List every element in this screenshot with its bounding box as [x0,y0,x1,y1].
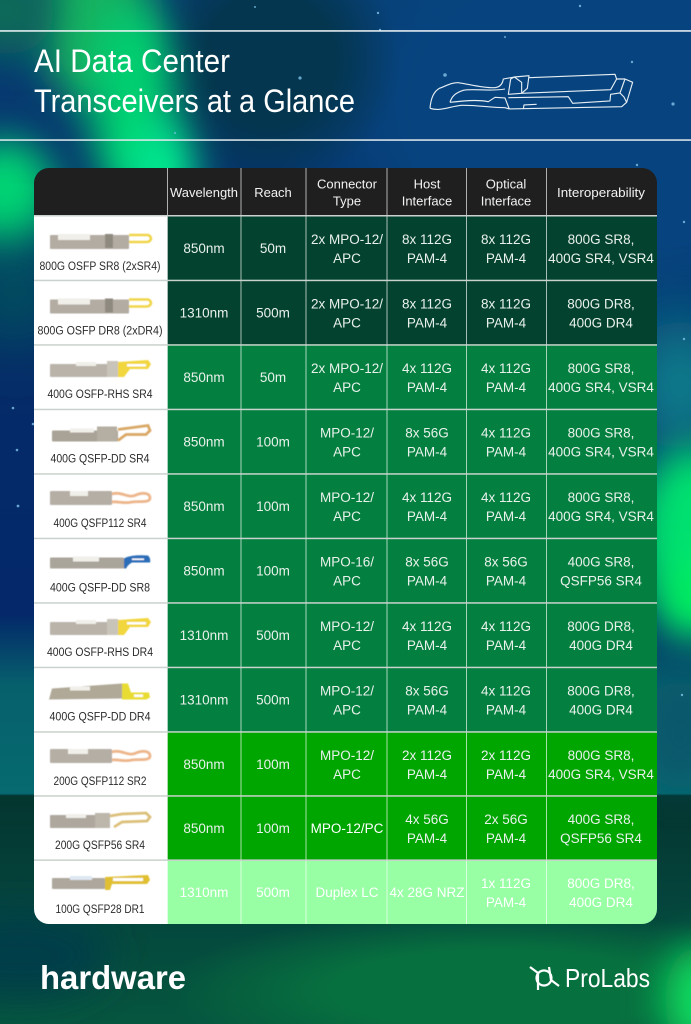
row: 400G OSFP-RHS DR4: 4x 112G [402,619,452,634]
row: 400G QSFP-DD SR4: 850nm [183,434,225,450]
icon: module [50,555,150,568]
row: 800G OSFP DR8: 800G OSFP DR8 (2xDR4) [38,326,163,338]
row: 800G OSFP DR8: APC [333,316,361,330]
row: 400G QSFP-DD DR4: MPO-12/ [320,684,374,698]
row: 800G OSFP SR8: PAM-4 [486,251,527,266]
row: 100G QSFP28 DR1: 100G QSFP28 DR1 [56,904,144,916]
row: 200G QSFP56 SR4: 2x 56G [484,812,528,827]
row: 100G QSFP28 DR1: 800G DR8, [567,876,635,891]
row: 800G OSFP SR8 [34,216,657,280]
row: 400G QSFP-DD DR4: 8x 56G [405,684,449,698]
row: 400G OSFP-RHS SR4: PAM-4 [407,380,448,395]
row: 100G QSFP28 DR1: 500m [256,885,290,900]
row: 200G QSFP112 SR2: 2x 112G [402,748,452,763]
row: 800G OSFP DR8: 500m [256,306,290,320]
row: 400G QSFP112 SR4: MPO-12/ [320,490,374,505]
row: 400G QSFP112 SR4: 4x 112G [402,490,452,505]
row: 200G QSFP112 SR2: MPO-12/ [320,748,374,763]
row: 800G OSFP DR8: 400G DR4 [569,316,633,330]
icon: module [50,234,151,249]
logo: ProLabs [530,963,650,993]
row: 400G QSFP-DD SR8 [34,538,657,602]
title: Transceivers at a Glance [34,83,355,119]
row: 100G QSFP28 DR1: PAM-4 [486,895,527,910]
row: 400G OSFP-RHS SR4: 400G SR4, VSR4 [548,380,654,395]
row: 400G QSFP-DD SR8: PAM-4 [407,574,448,588]
row: 400G QSFP-DD SR8: QSFP56 SR4 [560,574,642,588]
top divider [0,30,691,32]
row: 400G OSFP-RHS SR4: 4x 112G [402,361,452,376]
row: 200G QSFP112 SR2: PAM-4 [486,767,527,782]
row: 100G QSFP28 DR1: 4x 28G NRZ [390,885,464,900]
row: 400G OSFP-RHS DR4: 800G DR8, [567,619,635,634]
table header: Optical [486,176,526,192]
row: 200G QSFP112 SR2 [34,732,657,796]
row: 400G QSFP112 SR4: 800G SR8, [568,490,634,505]
row: 200G QSFP56 SR4: PAM-4 [407,831,448,846]
row: 400G QSFP-DD SR4: 400G QSFP-DD SR4 [50,454,150,466]
row: 800G OSFP SR8: 850nm [183,241,225,256]
row: 400G OSFP-RHS SR4: 400G OSFP-RHS SR4 [48,389,153,401]
title [34,43,355,119]
row: 800G OSFP SR8: 50m [260,241,286,256]
row: 100G QSFP28 DR1: 400G DR4 [569,895,633,910]
row: 400G QSFP112 SR4: 4x 112G [481,490,531,505]
row: 400G QSFP-DD DR4: 400G DR4 [569,702,633,718]
row: 400G OSFP-RHS DR4: APC [333,638,361,653]
table header: Type [333,194,361,208]
row: 400G OSFP-RHS DR4: 4x 112G [481,619,531,634]
title: AI Data Center [34,43,230,79]
row: 400G QSFP112 SR4: PAM-4 [407,509,448,524]
row: 400G OSFP-RHS SR4: 50m [260,370,286,385]
comparison table [34,168,657,924]
row: 200G QSFP56 SR4: 850nm [183,821,225,836]
row: 400G QSFP-DD SR4: MPO-12/ [320,426,374,440]
logo: hardware: hardware [40,959,186,996]
row: 800G OSFP DR8: PAM-4 [407,316,448,330]
row: 400G OSFP-RHS DR4: 500m [256,628,290,643]
table header: Host [414,176,441,192]
row: 800G OSFP DR8: 8x 112G [402,296,452,312]
row: 200G QSFP112 SR2: 850nm [183,757,225,772]
row: 400G QSFP-DD DR4: 1310nm [180,692,228,708]
row: 200G QSFP112 SR2: 400G SR4, VSR4 [548,767,654,782]
row: 100G QSFP28 DR1 [34,860,657,924]
row: 200G QSFP56 SR4: 400G SR8, [568,812,634,827]
row: 400G QSFP112 SR4: 400G QSFP112 SR4 [54,518,147,530]
row: 800G OSFP DR8: 800G DR8, [567,296,635,312]
row: 400G QSFP-DD SR4 [34,410,657,474]
icon: transceiver outline [430,74,633,109]
icon: module [49,684,150,700]
row: 400G QSFP-DD SR8: APC [333,574,361,588]
row: 400G QSFP-DD SR8: 8x 56G [405,554,449,570]
row: 200G QSFP56 SR4: 4x 56G [405,812,449,827]
icon: module [50,813,150,828]
row: 400G QSFP-DD SR4: 8x 56G [405,426,449,440]
table header: Interoperability [557,185,646,200]
icon: module [50,618,151,635]
row: 400G QSFP112 SR4: 850nm [183,499,225,514]
row: 800G OSFP DR8: 1310nm [180,306,228,320]
row: 400G QSFP-DD SR4: 100m [256,434,290,450]
row: 100G QSFP28 DR1: 1310nm [180,885,228,900]
row: 800G OSFP SR8: 2x MPO-12/ [311,232,383,247]
logo: ProLabs: ProLabs [565,963,650,993]
icon: module [52,875,150,890]
row: 400G QSFP-DD DR4: 800G DR8, [567,684,635,698]
row: 800G OSFP SR8: 800G SR8, [568,232,634,247]
row: 200G QSFP112 SR2: 800G SR8, [568,748,634,763]
row: 400G OSFP-RHS DR4: PAM-4 [407,638,448,653]
row: 400G OSFP-RHS SR4: 800G SR8, [568,361,634,376]
row: 400G QSFP-DD DR4: 500m [256,692,290,708]
row: 400G QSFP-DD SR8: 8x 56G [484,554,528,570]
row: 400G QSFP-DD SR8: PAM-4 [486,574,527,588]
row: 400G OSFP-RHS SR4: 4x 112G [481,361,531,376]
row: 800G OSFP SR8: 8x 112G [481,232,531,247]
row: 200G QSFP56 SR4: 100m [256,821,290,836]
row: 400G OSFP-RHS SR4: 850nm [183,370,225,385]
row: 800G OSFP DR8: PAM-4 [486,316,527,330]
row: 400G QSFP-DD DR4: PAM-4 [486,702,527,718]
table header: Connector [317,176,378,192]
row: 400G OSFP-RHS SR4 [34,345,657,409]
icon: ProLabs mark [530,967,559,990]
row: 400G OSFP-RHS SR4: APC [333,380,361,395]
table header: Interface [481,194,531,208]
row: 400G QSFP-DD DR4: 4x 112G [481,684,531,698]
row: 400G QSFP-DD SR4: 4x 112G [481,426,531,440]
row: 400G OSFP-RHS DR4 [34,603,657,667]
row: 400G OSFP-RHS SR4: 2x MPO-12/ [311,361,383,376]
row: 400G QSFP-DD SR4: APC [333,444,361,460]
row: 400G QSFP112 SR4 [34,474,657,538]
row: 400G QSFP-DD DR4: PAM-4 [407,702,448,718]
icon: module [50,491,150,505]
row: 400G QSFP112 SR4: PAM-4 [486,509,527,524]
row: 400G QSFP-DD SR8: MPO-16/ [320,554,374,570]
row: 400G OSFP-RHS SR4: PAM-4 [486,380,527,395]
row: 400G OSFP-RHS DR4: 400G DR4 [569,638,633,653]
row: 400G QSFP-DD SR4: 800G SR8, [568,426,634,440]
row: 800G OSFP DR8 [34,280,657,344]
row: 200G QSFP112 SR2: 200G QSFP112 SR2 [54,776,146,788]
icon: module [50,749,150,763]
row: 400G QSFP-DD SR8: 400G QSFP-DD SR8 [50,582,150,594]
icon: module [50,298,151,314]
row: 200G QSFP56 SR4: MPO-12/PC [311,821,384,836]
table header: Interface [402,194,452,208]
row: 200G QSFP56 SR4: 200G QSFP56 SR4 [55,840,146,852]
row: 400G QSFP-DD SR4: 400G SR4, VSR4 [548,444,654,460]
row: 400G QSFP-DD SR4: PAM-4 [486,444,527,460]
row: 400G QSFP112 SR4: 100m [256,499,290,514]
row: 200G QSFP112 SR2: APC [333,767,361,782]
row: 200G QSFP112 SR2: 100m [256,757,290,772]
row: 100G QSFP28 DR1: 1x 112G [481,876,531,891]
row: 400G QSFP-DD SR8: 400G SR8, [568,554,634,570]
table header: Reach [254,185,292,200]
row: 800G OSFP SR8: APC [333,251,361,266]
bottom divider [0,139,691,141]
row: 400G OSFP-RHS DR4: 1310nm [180,628,228,643]
row: 800G OSFP SR8: PAM-4 [407,251,448,266]
row: 200G QSFP56 SR4 [34,796,657,860]
row: 400G QSFP112 SR4: APC [333,509,361,524]
icon: module [52,426,150,442]
row: 400G QSFP-DD DR4: APC [333,702,361,718]
table header [34,168,657,216]
row: 400G OSFP-RHS DR4: PAM-4 [486,638,527,653]
row: 400G OSFP-RHS DR4: 400G OSFP-RHS DR4 [47,647,154,659]
table header: Wavelength [170,185,238,200]
row: 400G QSFP-DD DR4 [34,668,657,732]
row: 400G QSFP-DD SR4: PAM-4 [407,444,448,460]
row: 100G QSFP28 DR1: Duplex LC [315,885,379,900]
row: 800G OSFP DR8: 8x 112G [481,296,531,312]
row: 400G QSFP112 SR4: 400G SR4, VSR4 [548,509,654,524]
row: 400G OSFP-RHS DR4: MPO-12/ [320,619,374,634]
row: 400G QSFP-DD SR8: 100m [256,564,290,578]
row: 800G OSFP SR8: 400G SR4, VSR4 [548,251,654,266]
row: 200G QSFP112 SR2: PAM-4 [407,767,448,782]
row: 200G QSFP56 SR4: QSFP56 SR4 [560,831,642,846]
row: 400G QSFP-DD SR8: 850nm [183,564,225,578]
row: 800G OSFP SR8: 8x 112G [402,232,452,247]
row: 400G QSFP-DD DR4: 400G QSFP-DD DR4 [50,712,151,724]
row: 200G QSFP112 SR2: 2x 112G [481,748,531,763]
row: 200G QSFP56 SR4: PAM-4 [486,831,527,846]
icon: module [50,360,151,377]
row: 800G OSFP SR8: 800G OSFP SR8 (2xSR4) [40,261,161,273]
row: 800G OSFP DR8: 2x MPO-12/ [311,296,383,312]
